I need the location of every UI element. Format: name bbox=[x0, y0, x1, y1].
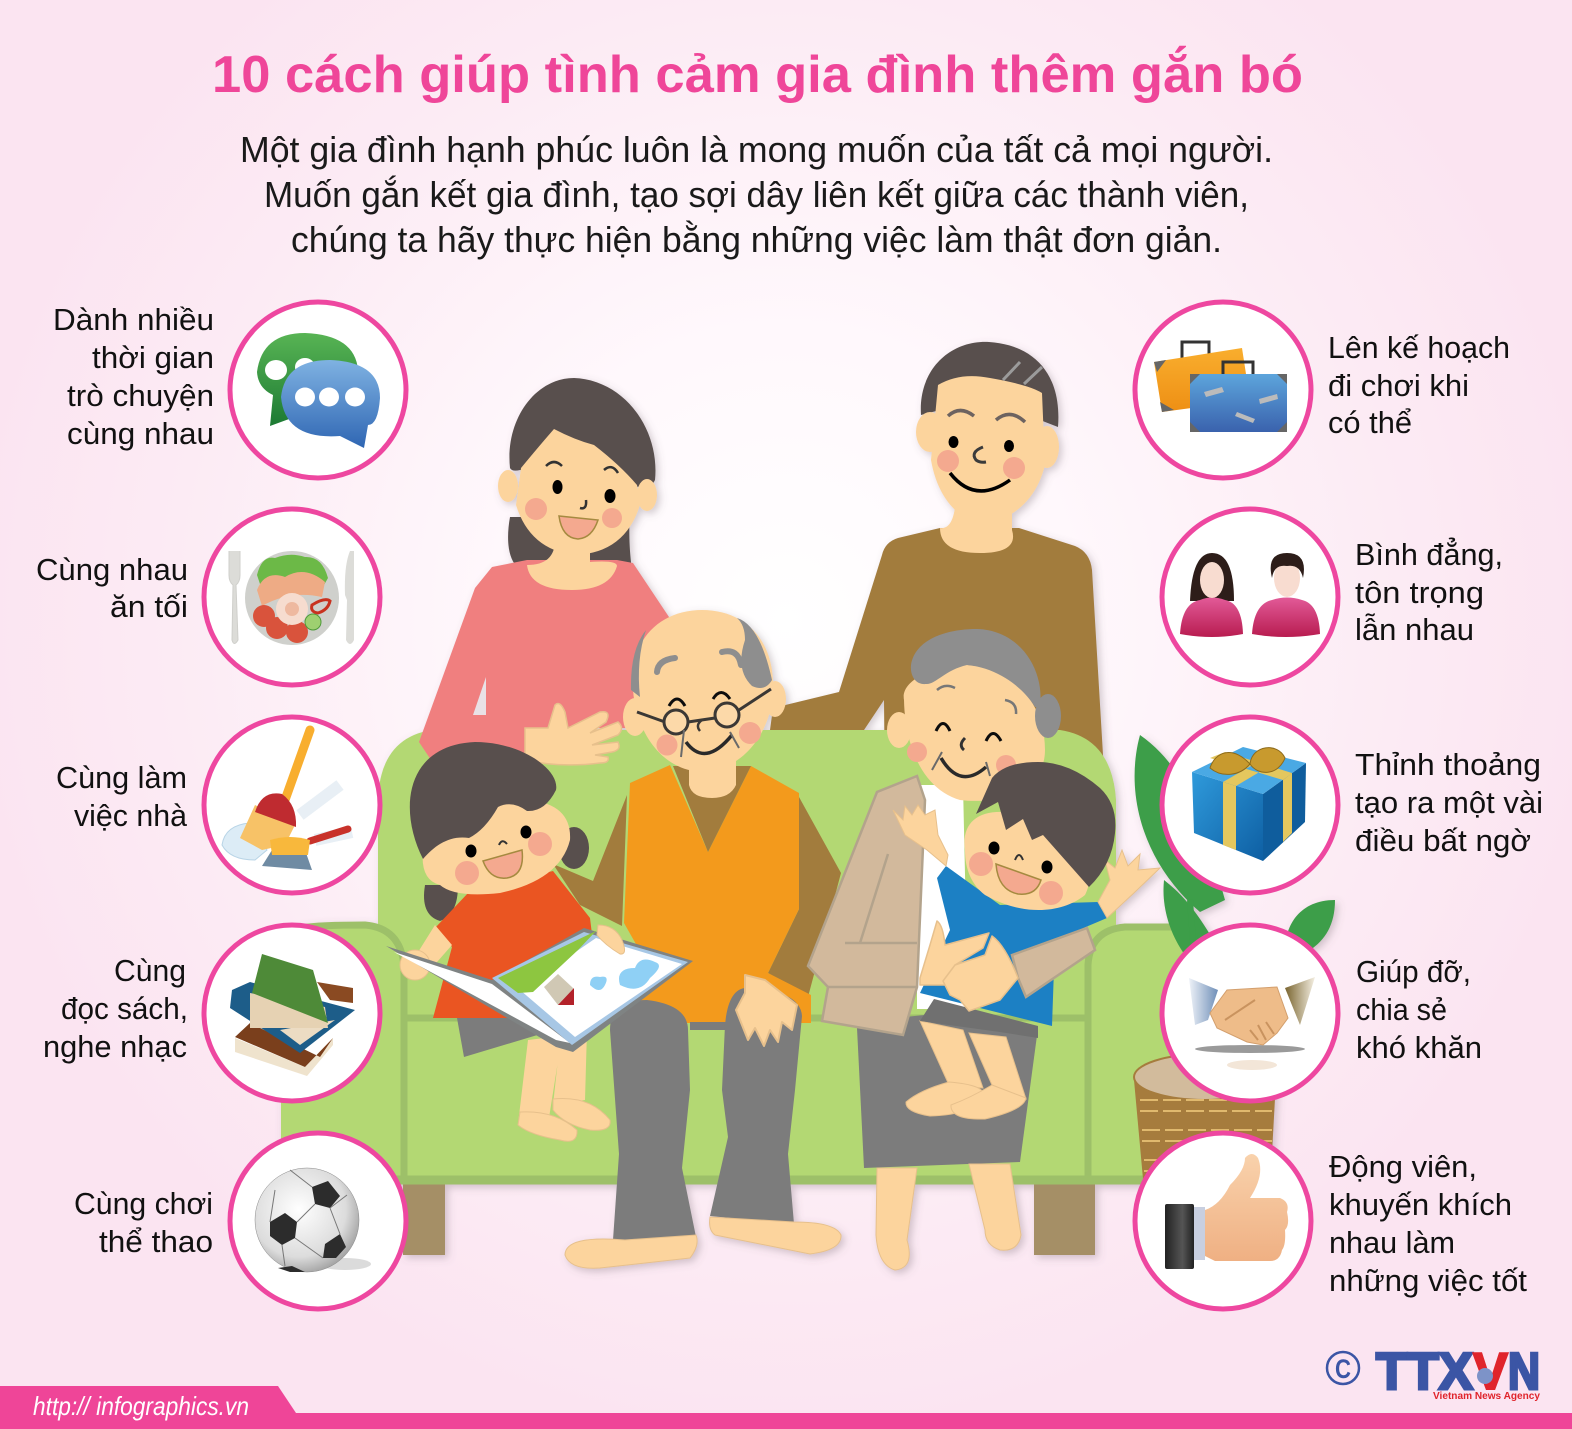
label: housework bbox=[56, 760, 188, 833]
label: encouragement: khuyến khích bbox=[1329, 1187, 1512, 1222]
logo: TTXVN: C bbox=[1335, 1354, 1351, 1384]
logo: TTXVN: TTX bbox=[1376, 1343, 1473, 1401]
icon: broom and brush bbox=[222, 730, 352, 870]
logo: TTXVN: Vietnam News Agency bbox=[1433, 1390, 1540, 1402]
panel: reading and music bbox=[204, 925, 380, 1101]
label: dinner together: ăn tối bbox=[110, 589, 188, 624]
panel: equality bbox=[1162, 509, 1338, 685]
label: plan trips: có thể bbox=[1328, 405, 1412, 440]
family illustration bbox=[281, 342, 1335, 1270]
label: share difficulties: khó khăn bbox=[1356, 1030, 1482, 1065]
icon: handshake bbox=[1189, 977, 1315, 1070]
label: sports: Cùng chơi bbox=[74, 1186, 213, 1221]
label: plan trips bbox=[1328, 330, 1510, 440]
mother bbox=[419, 378, 669, 765]
label: plan trips: đi chơi khi bbox=[1328, 368, 1469, 403]
icon: woman and man bbox=[1180, 553, 1320, 637]
label: equality: Bình đẳng, bbox=[1355, 536, 1503, 572]
label: talk together bbox=[53, 302, 214, 451]
label: dinner together bbox=[36, 552, 188, 624]
label: talk together: Dành nhiều bbox=[53, 302, 214, 337]
icon: dinner plate bbox=[229, 551, 354, 645]
intro text bbox=[240, 129, 1273, 260]
panel: sports bbox=[230, 1133, 406, 1309]
label: sports: thể thao bbox=[99, 1224, 213, 1259]
icon: stack of books bbox=[230, 954, 355, 1076]
label: sports bbox=[74, 1186, 213, 1259]
label: equality: tôn trọng bbox=[1355, 575, 1484, 610]
label: equality bbox=[1355, 536, 1503, 647]
open book bbox=[386, 925, 693, 1052]
label: encouragement: Động viên, bbox=[1329, 1149, 1477, 1184]
label: surprises: tạo ra một vài bbox=[1355, 785, 1543, 820]
panel: plan trips bbox=[1135, 302, 1311, 478]
intro text: Một gia đình hạnh phúc luôn là mong muốn của tất cả mọi người. bbox=[240, 129, 1273, 170]
icon: football bbox=[255, 1168, 371, 1272]
panel: housework bbox=[204, 717, 380, 893]
panel: surprises bbox=[1162, 717, 1338, 893]
label: reading and music: nghe nhạc bbox=[43, 1029, 187, 1064]
father bbox=[770, 342, 1110, 800]
label: share difficulties: Giúp đỡ, bbox=[1356, 954, 1471, 989]
label: surprises: điều bất ngờ bbox=[1355, 823, 1531, 858]
plant bbox=[1135, 735, 1335, 1060]
label: equality: lẫn nhau bbox=[1355, 612, 1474, 647]
label: talk together: thời gian bbox=[92, 340, 214, 375]
girl bbox=[400, 742, 610, 1141]
boy bbox=[893, 762, 1160, 1119]
basket bbox=[1134, 1054, 1276, 1190]
label: housework: Cùng làm bbox=[56, 760, 187, 795]
title: 10 cách giúp tình cảm gia đình thêm gắn bó bbox=[212, 45, 1303, 104]
logo: TTXVN bbox=[1327, 1343, 1540, 1402]
label: share difficulties bbox=[1356, 954, 1482, 1065]
grandmother bbox=[808, 629, 1061, 1270]
label: encouragement: nhau làm bbox=[1329, 1225, 1455, 1260]
panel: talk together bbox=[230, 302, 406, 478]
intro text: chúng ta hãy thực hiện bằng những việc làm thật đơn giản. bbox=[291, 219, 1222, 260]
icon: chat bubbles bbox=[257, 333, 380, 448]
label: plan trips: Lên kế hoạch bbox=[1328, 330, 1510, 365]
label: talk together: cùng nhau bbox=[67, 416, 214, 451]
footer bar bbox=[0, 1386, 1572, 1429]
panel: encouragement bbox=[1135, 1133, 1311, 1309]
website url: http:// infographics.vn bbox=[33, 1391, 249, 1421]
sofa bbox=[281, 730, 1200, 1255]
grandfather bbox=[553, 610, 841, 1268]
intro text: Muốn gắn kết gia đình, tạo sợi dây liên kết giữa các thành viên, bbox=[264, 174, 1249, 215]
icon: gift box bbox=[1192, 747, 1306, 861]
label: housework: việc nhà bbox=[74, 798, 188, 833]
label: share difficulties: chia sẻ bbox=[1356, 992, 1447, 1027]
label: surprises: Thỉnh thoảng bbox=[1355, 747, 1541, 782]
label: reading and music: đọc sách, bbox=[61, 991, 188, 1026]
label: talk together: trò chuyện bbox=[67, 378, 214, 413]
label: encouragement bbox=[1329, 1149, 1527, 1298]
label: dinner together: Cùng nhau bbox=[36, 552, 188, 587]
panel: share difficulties bbox=[1162, 925, 1338, 1101]
label: encouragement: những việc tốt bbox=[1329, 1263, 1527, 1298]
logo: TTXVN: N bbox=[1508, 1343, 1540, 1401]
logo: TTXVN: V bbox=[1473, 1343, 1508, 1401]
icon: thumbs up bbox=[1165, 1154, 1288, 1269]
label: reading and music: Cùng bbox=[114, 953, 186, 988]
panel: dinner together bbox=[204, 509, 380, 685]
label: reading and music bbox=[43, 953, 188, 1064]
label: surprises bbox=[1355, 747, 1543, 858]
icon: suitcases bbox=[1154, 342, 1287, 432]
